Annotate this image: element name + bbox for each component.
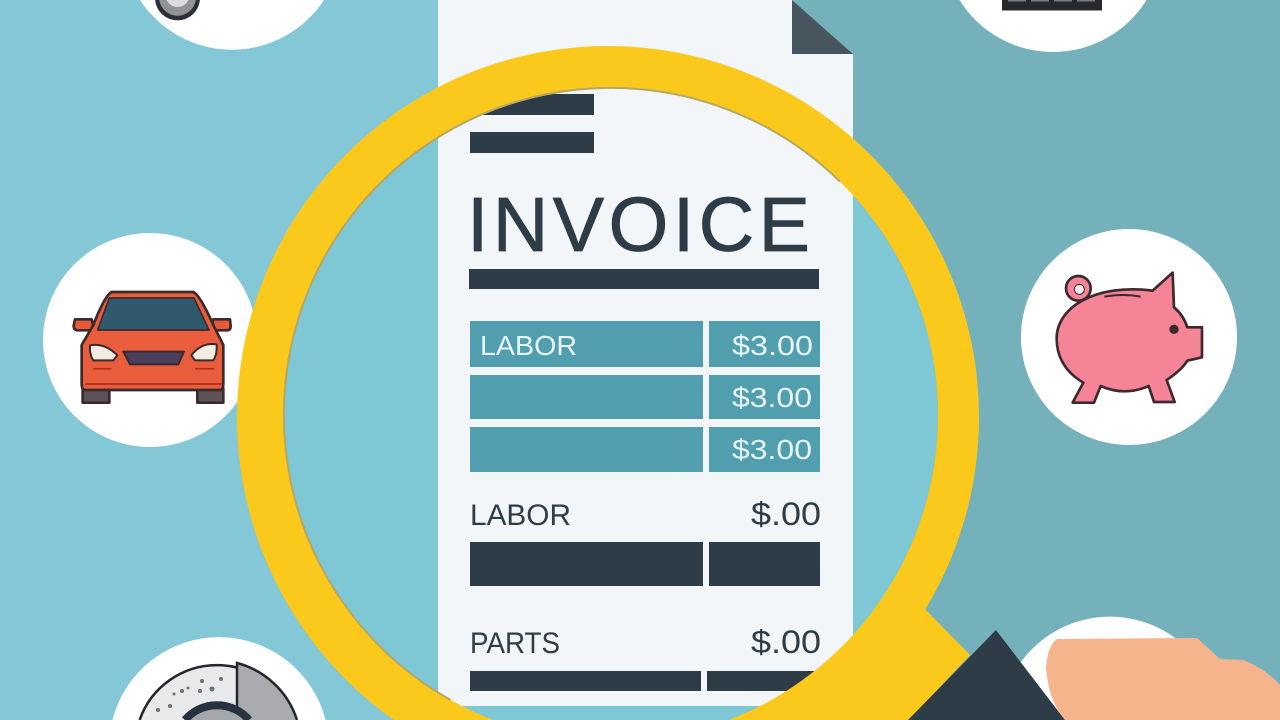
table labels and amounts: LABOR (480, 330, 577, 361)
icon circle: red car (43, 233, 257, 447)
table labels and amounts: $3.00 (732, 330, 813, 361)
parts row: $.00 (751, 624, 821, 660)
invoice document (438, 0, 853, 706)
background behind cut corner (792, 0, 853, 54)
teal line item table (470, 321, 820, 472)
folded corner (792, 0, 853, 54)
parts row (470, 624, 821, 691)
paper sheet (438, 0, 853, 706)
table labels and amounts: $3.00 (732, 382, 812, 413)
icon circle: piggy bank (1021, 229, 1237, 445)
lens ring (237, 46, 979, 720)
labor row: $.00 (751, 496, 821, 532)
icon circle: wheel top left (140, 0, 324, 50)
header bars (470, 94, 594, 153)
labor row: LABOR (470, 499, 571, 532)
icon circle: brake disc (112, 637, 326, 720)
table labels and amounts: $3.00 (732, 434, 812, 465)
handle grip (908, 630, 1065, 720)
handle collar (780, 609, 970, 720)
icon circle: bottom right (1000, 617, 1220, 720)
piggy drawing (1057, 273, 1202, 403)
hand (1046, 638, 1280, 720)
title rule (469, 269, 819, 289)
table labels and amounts (480, 330, 813, 465)
car drawing (74, 292, 231, 403)
icon circle: grid top right (960, 0, 1146, 52)
labor row (470, 496, 821, 586)
parts row: PARTS (470, 627, 560, 660)
magnifying glass (237, 46, 1065, 720)
invoice title: INVOICE (467, 182, 810, 268)
lens glass tint (284, 88, 938, 720)
lens inner shadow (284, 88, 840, 700)
